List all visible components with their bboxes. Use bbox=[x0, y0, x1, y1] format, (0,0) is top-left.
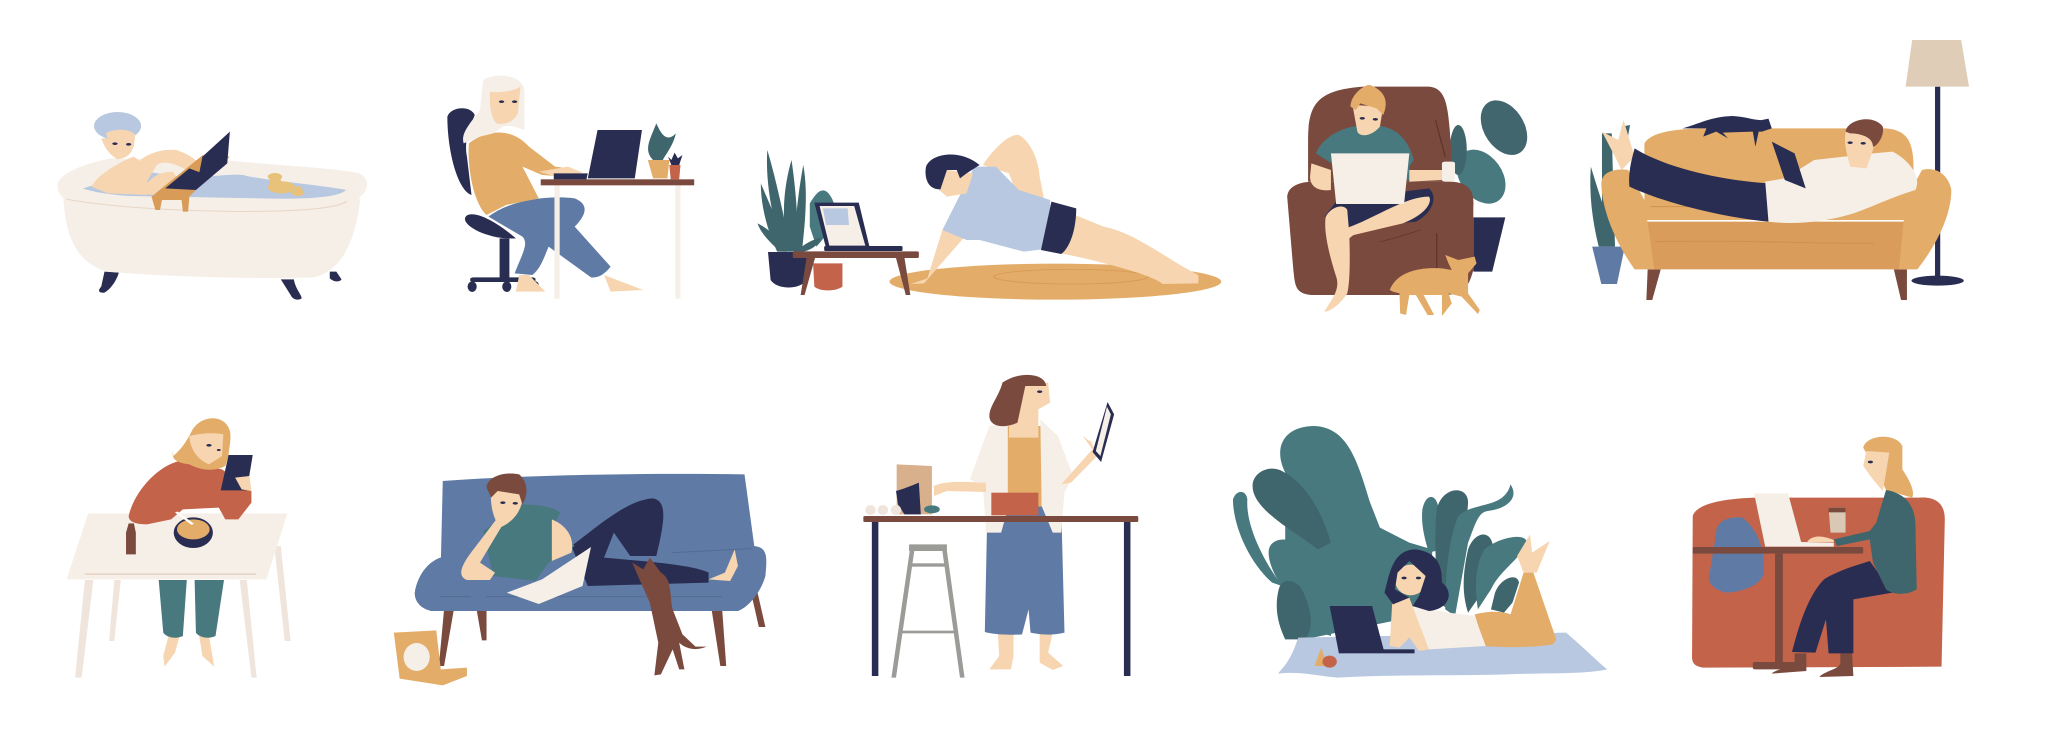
trousers and feet bbox=[159, 580, 224, 667]
red booth bbox=[1692, 497, 1945, 668]
scene: man in armchair with dog bbox=[1287, 85, 1535, 316]
blanket bbox=[1279, 633, 1607, 678]
tan sofa bbox=[1601, 128, 1951, 300]
yoga rug bbox=[889, 264, 1221, 300]
cafe table with laptop bbox=[1693, 493, 1863, 669]
woman cooking bbox=[934, 375, 1114, 670]
person in plank bbox=[911, 135, 1198, 284]
woman bbox=[463, 76, 643, 292]
snake plant bbox=[1590, 125, 1630, 284]
desk with laptop bbox=[541, 130, 694, 299]
laptop and fruit bbox=[1315, 606, 1415, 668]
scene: woman at cafe table bbox=[1692, 437, 1945, 677]
dog bbox=[1390, 255, 1480, 316]
scene: man lying on tan sofa bbox=[1590, 40, 1969, 300]
potted plants bbox=[758, 150, 842, 290]
woman in cafe bbox=[1772, 437, 1917, 677]
tall plant bbox=[1449, 99, 1535, 272]
backpack bbox=[1709, 517, 1764, 593]
person in bath bbox=[91, 112, 199, 195]
counter and cooking pot bbox=[863, 493, 1138, 676]
scene: woman at desk on office chair bbox=[447, 76, 694, 299]
low table with laptop bbox=[793, 203, 919, 295]
scene: man lying on blue sofa bbox=[394, 473, 766, 685]
scene: woman on blanket with plants bbox=[1233, 426, 1607, 678]
armchair bbox=[1287, 87, 1473, 295]
bar stool bbox=[891, 544, 965, 678]
man with laptop bbox=[1310, 85, 1455, 312]
woman with tablet bbox=[129, 418, 253, 524]
back table legs bbox=[109, 546, 291, 641]
floor lamp bbox=[1906, 40, 1969, 286]
scene: person working in a bathtub bbox=[57, 112, 367, 300]
scene: yoga plank with laptop bbox=[758, 135, 1221, 300]
scene: woman eating at table with tablet bbox=[67, 418, 291, 678]
cat bbox=[1682, 116, 1772, 147]
large leaves bbox=[1233, 426, 1527, 639]
counter items bbox=[865, 464, 940, 515]
pizza box bbox=[394, 630, 467, 685]
man with tablet bbox=[1602, 119, 1917, 223]
cereal bowl and bottle bbox=[126, 512, 213, 554]
blue sofa bbox=[415, 474, 766, 666]
scene: woman cooking at kitchen counter bbox=[863, 375, 1138, 678]
table top bbox=[67, 513, 287, 678]
rubber ducks bbox=[268, 173, 304, 196]
brown dog bbox=[632, 558, 707, 675]
bathtub bbox=[57, 158, 367, 300]
bath tray and laptop bbox=[152, 132, 230, 212]
desk plants bbox=[648, 123, 682, 179]
woman lying down bbox=[1384, 534, 1556, 651]
office chair bbox=[447, 108, 539, 292]
man with laptop bbox=[461, 473, 738, 604]
